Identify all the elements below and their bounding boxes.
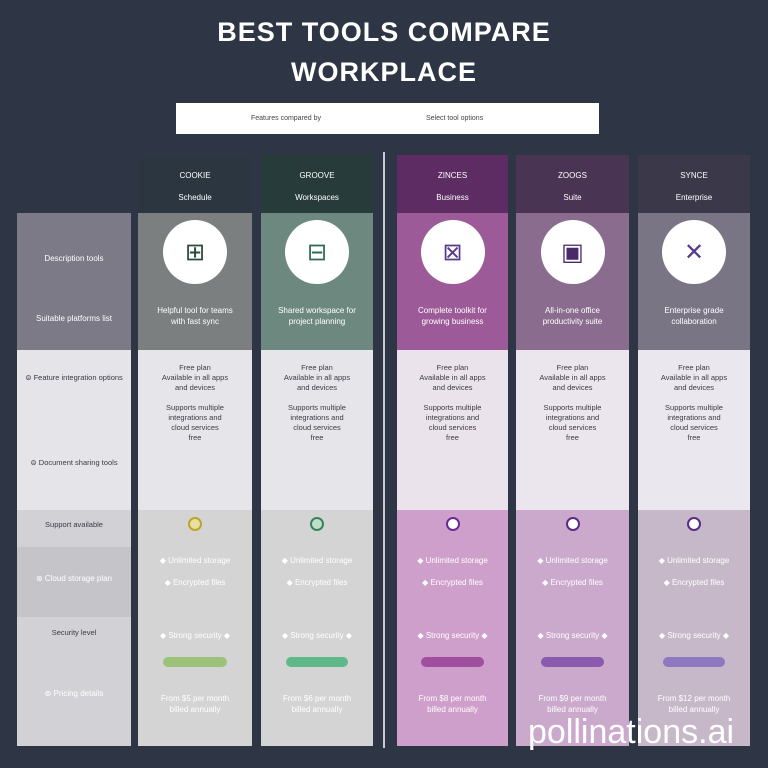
column 1: with fast sync — [171, 317, 219, 326]
column 2: billed annually — [292, 705, 342, 714]
column 4: Suite — [563, 193, 582, 202]
column 5: billed annually — [669, 705, 719, 714]
column 5: integrations and — [667, 413, 721, 422]
column 3: Supports multiple — [424, 403, 481, 412]
column 3: Available in all apps — [419, 373, 486, 382]
column 5 — [638, 155, 750, 746]
column 2: Supports multiple — [288, 403, 346, 412]
column 4: cloud services — [549, 423, 596, 432]
label column: ⊛ Pricing details — [45, 689, 103, 698]
column 3: Complete toolkit for — [418, 306, 487, 315]
column 2: ◆ Encrypted files — [287, 578, 347, 587]
column 2 — [261, 155, 373, 746]
column 5: ◆ Encrypted files — [664, 578, 724, 587]
column 3: ⊠ — [442, 238, 463, 266]
column 1: Supports multiple — [166, 403, 224, 412]
column 3: ◆ Strong security ◆ — [417, 631, 488, 640]
column 2: ◆ Unlimited storage — [282, 556, 352, 565]
column 3: and devices — [432, 383, 473, 392]
label column: Security level — [52, 628, 96, 637]
column 1: ◆ Encrypted files — [165, 578, 225, 587]
column 2: ⊟ — [307, 238, 327, 266]
column 2: ◆ Strong security ◆ — [282, 631, 352, 640]
label column: ⊛ Cloud storage plan — [36, 574, 112, 583]
column 2: and devices — [297, 383, 337, 392]
column 1: Schedule — [178, 193, 212, 202]
column 2: project planning — [289, 317, 345, 326]
label column: Suitable platforms list — [36, 314, 112, 323]
column 4: ZOOGS — [558, 171, 587, 180]
column 5: ✕ — [684, 238, 704, 266]
column 1: ◆ Unlimited storage — [160, 556, 230, 565]
column 1: and devices — [175, 383, 215, 392]
search bar: Select tool options — [426, 115, 483, 122]
column 4: billed annually — [547, 705, 598, 714]
column 1: ◆ Strong security ◆ — [160, 631, 230, 640]
column 2: Workspaces — [295, 193, 339, 202]
title: BEST TOOLS COMPARE — [217, 17, 551, 47]
column 3: growing business — [422, 317, 483, 326]
column 4: Supports multiple — [544, 403, 601, 412]
column 3: ◆ Encrypted files — [422, 578, 483, 587]
column 5: ◆ Strong security ◆ — [659, 631, 729, 640]
column 5: Free plan — [678, 363, 710, 372]
column 3: Free plan — [437, 363, 468, 372]
column 5: From $12 per month — [658, 694, 730, 703]
column 5: free — [688, 433, 700, 442]
column 4: productivity suite — [543, 317, 602, 326]
column 4: Available in all apps — [539, 373, 606, 382]
column 4: and devices — [552, 383, 593, 392]
title — [217, 17, 551, 87]
column 3: free — [446, 433, 459, 442]
column 4: Free plan — [557, 363, 588, 372]
label column: Description tools — [44, 254, 104, 263]
column 5: SYNCE — [680, 171, 708, 180]
column 2: free — [311, 433, 323, 442]
column 1: Available in all apps — [162, 373, 228, 382]
column 5: Enterprise grade — [664, 306, 724, 315]
column 3: integrations and — [426, 413, 479, 422]
column 3: ◆ Unlimited storage — [417, 556, 488, 565]
column 1 — [138, 171, 252, 746]
column 4: ◆ Strong security ◆ — [537, 631, 608, 640]
column 1: cloud services — [171, 423, 219, 432]
column 4 — [516, 155, 629, 746]
column 4: integrations and — [546, 413, 599, 422]
column 1: Helpful tool for teams — [157, 306, 233, 315]
title: WORKPLACE — [291, 57, 477, 87]
search bar — [176, 103, 599, 134]
column 3: cloud services — [429, 423, 476, 432]
search bar: Features compared by — [251, 115, 321, 122]
column 4: ◆ Unlimited storage — [537, 556, 608, 565]
column 1: free — [189, 433, 201, 442]
column 3: billed annually — [427, 705, 478, 714]
column 1: billed annually — [170, 705, 220, 714]
column 4: ▣ — [561, 238, 584, 266]
column 4: free — [566, 433, 579, 442]
column 3: Business — [436, 193, 469, 202]
column 2: cloud services — [293, 423, 341, 432]
label column: Support available — [45, 520, 103, 529]
column 3: ZINCES — [438, 171, 467, 180]
column 5: and devices — [674, 383, 714, 392]
column 1: From $5 per month — [161, 694, 229, 703]
label column — [17, 213, 131, 746]
column 5: ◆ Unlimited storage — [659, 556, 729, 565]
label column: ⊜ Document sharing tools — [30, 458, 118, 467]
label column: ⊜ Feature integration options — [25, 373, 123, 382]
column 2: Shared workspace for — [278, 306, 356, 315]
column 2: From $6 per month — [283, 694, 351, 703]
divider — [383, 152, 385, 748]
column 2: Available in all apps — [284, 373, 350, 382]
column 3: From $8 per month — [418, 694, 487, 703]
column 1: COOKIE — [179, 171, 211, 180]
column 4: ◆ Encrypted files — [542, 578, 603, 587]
column 2: GROOVE — [299, 171, 335, 180]
column 4: From $9 per month — [538, 694, 607, 703]
column 2: integrations and — [290, 413, 344, 422]
column 5: collaboration — [671, 317, 717, 326]
column 5: cloud services — [670, 423, 718, 432]
column 1: ⊞ — [185, 238, 205, 266]
watermark: pollinations.ai — [528, 713, 734, 751]
column 3 — [397, 155, 508, 746]
column 1: integrations and — [168, 413, 222, 422]
column 5: Supports multiple — [665, 403, 723, 412]
column 4: All-in-one office — [545, 306, 600, 315]
column 5: Enterprise — [676, 193, 712, 202]
column 1: Free plan — [179, 363, 211, 372]
column 5: Available in all apps — [661, 373, 727, 382]
column 2: Free plan — [301, 363, 333, 372]
